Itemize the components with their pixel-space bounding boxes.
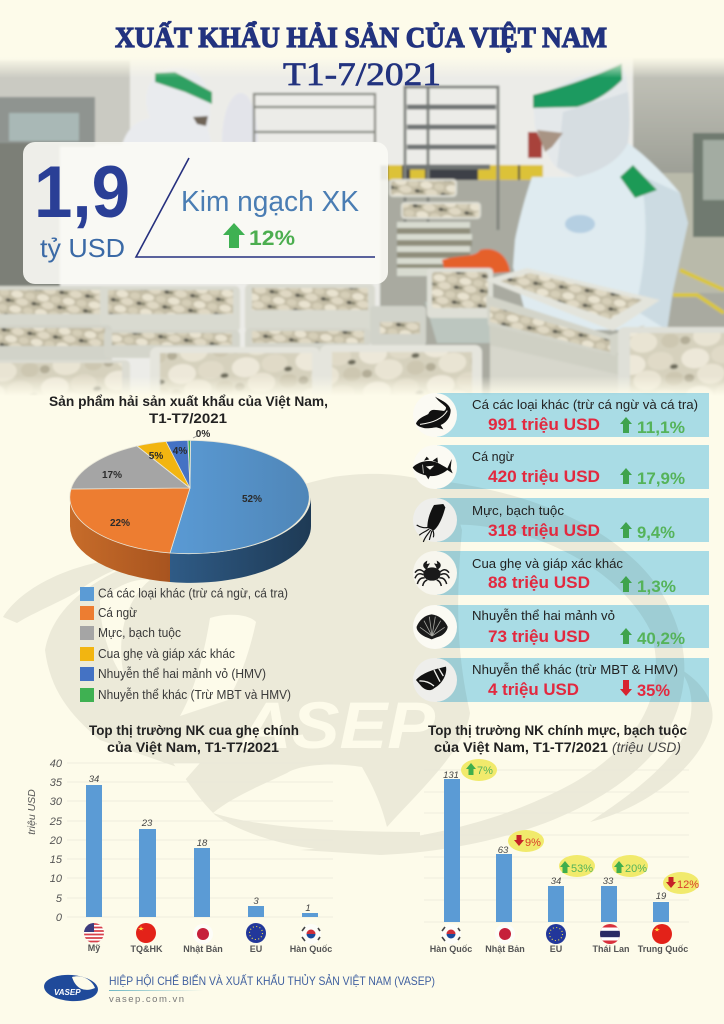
- legend: pie chart: Mực, bạch tuộc: [98, 626, 181, 640]
- center tray stack: [390, 180, 456, 196]
- row: other molluscs: [413, 658, 709, 702]
- bars: [444, 779, 669, 922]
- bar values: 34: [551, 876, 561, 887]
- growth arrow: [223, 223, 245, 248]
- flag: Japan: [495, 924, 515, 944]
- pie chart: 4%: [173, 446, 187, 457]
- row: bivalves: Nhuyễn thể hai mảnh vỏ: [472, 608, 615, 623]
- bar values: [89, 774, 311, 914]
- category labels: [88, 943, 332, 954]
- y axis: 5: [56, 893, 63, 905]
- footer logo: VASEP: VASEP: [54, 988, 81, 997]
- category labels: Thái Lan: [592, 944, 630, 954]
- heading: pie chart: [49, 394, 328, 426]
- category labels: [430, 944, 688, 954]
- growth value: 12%: [249, 227, 295, 250]
- right rack: [405, 87, 498, 230]
- callout: +7%: 7%: [477, 765, 493, 777]
- row: other fish: 11,1%: [637, 418, 685, 437]
- row: bivalves: [413, 605, 709, 649]
- footer logo: VASEP: [43, 973, 99, 1003]
- right worker: suit: [513, 143, 688, 330]
- y axis: [26, 758, 63, 924]
- watermark cut-outs: [100, 580, 436, 780]
- tray on plate: [425, 302, 493, 343]
- bar chart: squid markets: [424, 759, 699, 954]
- pie chart: [70, 429, 311, 583]
- label: Kim ngạch XK: [181, 186, 360, 218]
- flag: EU: [246, 923, 266, 943]
- flag: Korea: [441, 924, 461, 944]
- row: crab: 1,3%: [637, 577, 676, 596]
- row: crab: Cua ghẹ và giáp xác khác: [472, 557, 623, 571]
- heading: crab markets chart: của Việt Nam, T1-T7/2021: [107, 740, 280, 755]
- left worker: [122, 130, 132, 142]
- row: other molluscs: 4 triệu USD: [488, 680, 579, 699]
- row: other fish: Cá các loại khác (trừ cá ngừ và cá tra): [472, 398, 698, 412]
- row: tuna: 17,9%: [637, 469, 685, 488]
- footer text: HIỆP HỘI CHẾ BIẾN VÀ XUẤT KHẨU THỦY SẢN VIỆT NAM (VASEP): [109, 973, 435, 988]
- pie chart: 22%: [110, 518, 130, 529]
- back row trays: [0, 284, 102, 326]
- bar chart: crab markets: [26, 758, 333, 954]
- right worker: logo: [565, 215, 595, 233]
- right worker: shoulder patch: [620, 165, 657, 198]
- pie chart: 0%: [196, 429, 210, 440]
- category labels: Nhật Bản: [183, 944, 223, 954]
- row: other fish: 991 triệu USD: [488, 415, 600, 434]
- heading: pie chart: T1-T7/2021: [149, 411, 228, 426]
- row: squid: 9,4%: [637, 523, 675, 542]
- extinguisher: [528, 132, 542, 158]
- heading: crab markets chart: [89, 723, 299, 755]
- tray stack right: [489, 344, 619, 392]
- right worker: hood: [536, 79, 624, 138]
- legend: pie chart: Cá các loại khác (trừ cá ngừ, cá tra): [98, 586, 288, 600]
- right wall: [633, 50, 724, 175]
- category labels: TQ&HK: [130, 944, 163, 954]
- unit: tỷ USD: [40, 233, 125, 263]
- row: tuna: 420 triệu USD: [488, 467, 600, 486]
- floor lines: [673, 270, 724, 313]
- bar values: 18: [197, 838, 208, 849]
- row: tuna: Cá ngừ: [472, 450, 514, 464]
- row: bivalves: 73 triệu USD: [488, 627, 590, 646]
- row: other fish: [413, 393, 709, 437]
- flag: China: [652, 924, 672, 944]
- row: crab: [413, 551, 709, 596]
- pie chart: 52%: [242, 494, 262, 505]
- flag: China: [136, 923, 156, 943]
- watermark cut-outs: ASEP: [238, 688, 436, 762]
- title: XUẤT KHẨU HẢI SẢN CỦA VIỆT NAM: [115, 20, 607, 54]
- heading: crab markets chart: Top thị trường NK cua ghẹ chính: [89, 723, 299, 738]
- title: [115, 20, 607, 93]
- category labels: Hàn Quốc: [290, 944, 332, 954]
- y axis: 15: [50, 854, 63, 866]
- bar values: 23: [141, 818, 153, 829]
- callout: -12%: 12%: [677, 879, 699, 891]
- callout: +7%: [461, 759, 497, 781]
- row: crab: 88 triệu USD: [488, 573, 590, 592]
- orange glove: [442, 249, 510, 274]
- y axis: 25: [49, 816, 63, 828]
- heading: squid markets chart: Top thị trường NK chính mực, bạch tuộc: [428, 723, 687, 738]
- flag: EU: [546, 924, 566, 944]
- front row trays: [11, 360, 130, 388]
- row: other molluscs: Nhuyễn thể khác (trừ MBT & HMV): [472, 662, 678, 677]
- panel: total export value: [23, 142, 388, 284]
- bar values: 34: [89, 774, 99, 785]
- callout: -9%: [508, 830, 544, 852]
- heading: pie chart: Sản phẩm hải sản xuất khẩu của Việt Nam,: [49, 394, 328, 409]
- right worker: green band: [533, 63, 622, 108]
- flag: Korea: [301, 924, 321, 944]
- small person behind: [224, 95, 252, 142]
- legend: pie chart: Nhuyễn thể hai mảnh vỏ (HMV): [98, 666, 266, 681]
- bar values: 3: [253, 896, 259, 907]
- callout: +53%: 53%: [571, 863, 593, 875]
- flag: Japan: [193, 924, 213, 944]
- bar values: 19: [656, 891, 667, 902]
- left rack: [254, 94, 375, 143]
- y axis: 30: [50, 796, 63, 808]
- callout: +20%: [612, 855, 648, 877]
- middle row trays: [0, 344, 112, 360]
- bar values: 131: [443, 770, 459, 781]
- category labels: Hàn Quốc: [430, 944, 472, 954]
- pie chart: 5%: [149, 451, 163, 462]
- bar values: 63: [498, 845, 509, 856]
- callout: -9%: 9%: [525, 837, 541, 849]
- title: T1-7/2021: [283, 57, 441, 93]
- y axis: 35: [50, 777, 63, 789]
- footer text: vasep.com.vn: [109, 994, 185, 1005]
- legend: pie chart: Nhuyễn thể khác (Trừ MBT và HMV): [98, 687, 291, 702]
- bar values: 1: [305, 903, 311, 914]
- flag: USA: [84, 923, 104, 943]
- legend: pie chart: [80, 586, 291, 702]
- flag: Thailand: [600, 924, 620, 944]
- category labels: EU: [550, 944, 562, 954]
- bottom-right tray: [617, 326, 724, 393]
- heading: squid markets chart: (triệu USD): [612, 740, 681, 755]
- angle rule: [136, 158, 375, 257]
- row: squid: 318 triệu USD: [488, 521, 600, 540]
- hazard stripes: [388, 165, 543, 180]
- row: other molluscs: 35%: [637, 681, 670, 700]
- photo: seafood processing workers: [0, 40, 724, 410]
- category labels: EU: [250, 944, 262, 954]
- y axis: 0: [56, 912, 63, 924]
- heading: squid markets chart: [428, 723, 687, 755]
- watermark: VASEP logo: [3, 474, 713, 855]
- callout: +53%: [559, 855, 595, 877]
- footer text: [109, 973, 435, 1005]
- y axis: triệu USD: [26, 789, 38, 835]
- row: bivalves: 40,2%: [637, 629, 685, 648]
- big number: 1,9: [34, 152, 130, 233]
- panel: product rows: [413, 393, 709, 702]
- bar values: 33: [603, 876, 614, 887]
- y axis: 20: [49, 835, 63, 847]
- category labels: Nhật Bản: [485, 944, 525, 954]
- right worker: face: [537, 130, 563, 152]
- legend: pie chart: Cá ngừ: [98, 606, 137, 620]
- legend: pie chart: Cua ghẹ và giáp xác khác: [98, 647, 235, 661]
- y axis: 40: [50, 758, 63, 770]
- callout: -12%: [663, 872, 699, 894]
- row: squid: Mực, bạch tuộc: [472, 504, 564, 518]
- bar values: [443, 770, 667, 902]
- category labels: Trung Quốc: [638, 944, 688, 954]
- pie chart: 17%: [102, 470, 122, 481]
- category labels: Mỹ: [88, 943, 100, 953]
- row: tuna: [413, 445, 709, 489]
- heading: squid markets chart: của Việt Nam, T1-T7/2021: [434, 740, 609, 755]
- callout: +20%: 20%: [625, 863, 647, 875]
- row: squid: [413, 498, 709, 542]
- y axis: 10: [50, 873, 63, 885]
- bars: [86, 785, 318, 917]
